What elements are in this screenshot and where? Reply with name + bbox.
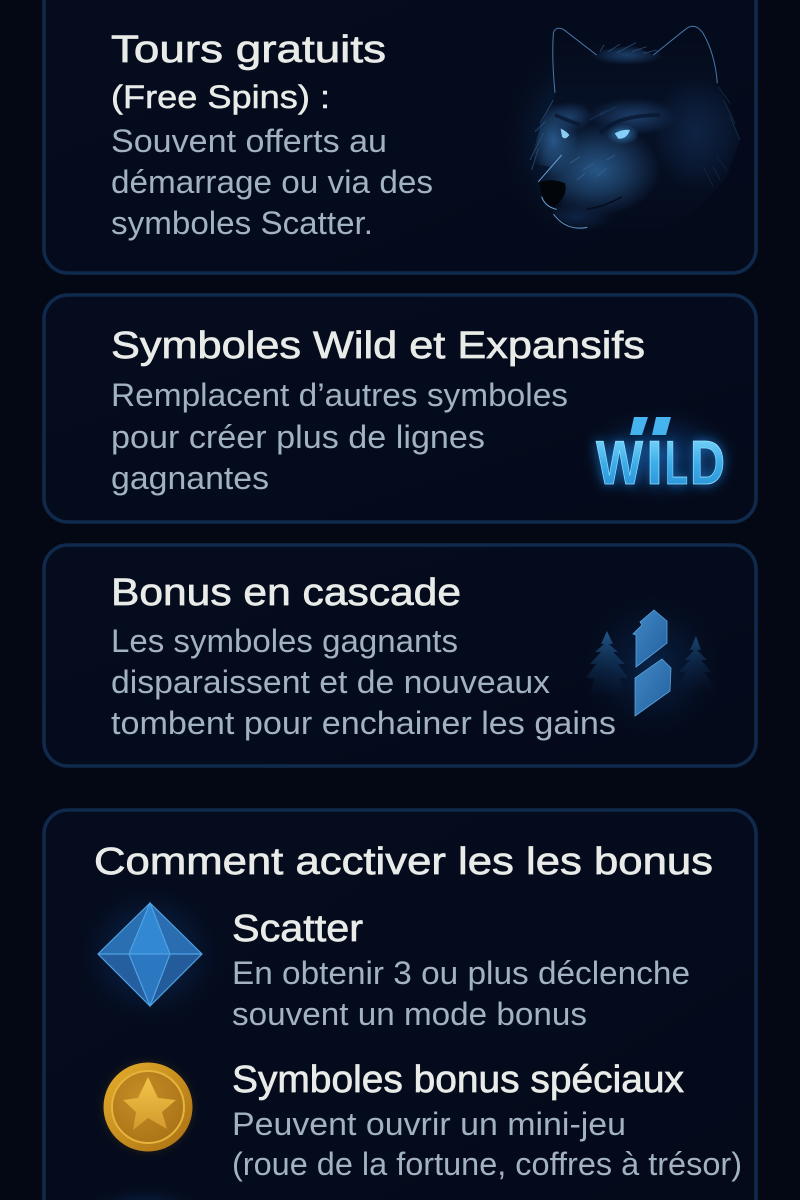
wolf brows [555, 115, 660, 133]
description: Remplacent d’autres symboles [111, 377, 568, 413]
icon: wild logo: L [665, 429, 688, 498]
wolf mouth [587, 197, 622, 209]
glow: next item cut off [85, 1185, 205, 1200]
panel: comment activer les bonus [44, 810, 756, 1200]
item description: scatter [232, 955, 690, 1032]
item description: symboles bonus: Peuvent ouvrir un mini-jeu [232, 1106, 626, 1142]
description: symboles Scatter. [111, 205, 373, 241]
heading: Tours gratuits [111, 29, 386, 71]
heading: Symboles Wild et Expansifs [111, 325, 645, 367]
icon: gold star coin [94, 1053, 202, 1161]
description: démarrage ou via des [111, 164, 433, 200]
icon: cascade shards and trees [578, 587, 726, 743]
icon: wild logo: I [646, 429, 663, 498]
icon: blue diamond scatter [72, 878, 228, 1030]
icon: wild logo [578, 403, 742, 507]
panel: bonus en cascade [44, 545, 756, 766]
wolf fur strokes [530, 43, 740, 187]
item description: scatter: souvent un mode bonus [232, 996, 587, 1032]
icon: wild logo: I [649, 429, 660, 498]
icon: wild logo: L [667, 429, 687, 498]
item title: scatter: Scatter [232, 908, 363, 950]
item title: symboles bonus: Symboles bonus spéciaux [232, 1059, 684, 1101]
subheading: (Free Spins) : [111, 79, 330, 115]
description: tombent pour enchainer les gains [111, 705, 616, 741]
item description: symboles bonus: (roue de la fortune, coffres à trésor) [232, 1146, 742, 1182]
panel: symboles wild [44, 295, 756, 522]
description [111, 623, 616, 741]
item description: symboles bonus [232, 1106, 742, 1182]
description: disparaissent et de nouveaux [111, 664, 550, 700]
wolf eye left [561, 129, 569, 138]
heading: Bonus en cascade [111, 572, 461, 614]
panel: tours gratuits [44, 0, 756, 273]
description: Les symboles gagnants [111, 623, 458, 659]
heading: Comment acctiver les les bonus [94, 841, 713, 883]
icon: wild logo: D [692, 429, 724, 498]
description [111, 377, 568, 496]
description: gagnantes [111, 460, 269, 496]
icon: wild logo: D [690, 429, 725, 498]
wolf head illustration [524, 26, 740, 229]
item description: scatter: En obtenir 3 ou plus déclenche [232, 955, 690, 991]
wolf eye right [606, 124, 639, 144]
icon: wild logo: W [596, 429, 643, 498]
description: Souvent offerts au [111, 123, 387, 159]
wolf nose [539, 180, 566, 207]
description [111, 123, 433, 241]
wolf rim light [553, 26, 717, 93]
description: pour créer plus de lignes [111, 419, 485, 455]
icon: wild logo: W [596, 429, 643, 498]
